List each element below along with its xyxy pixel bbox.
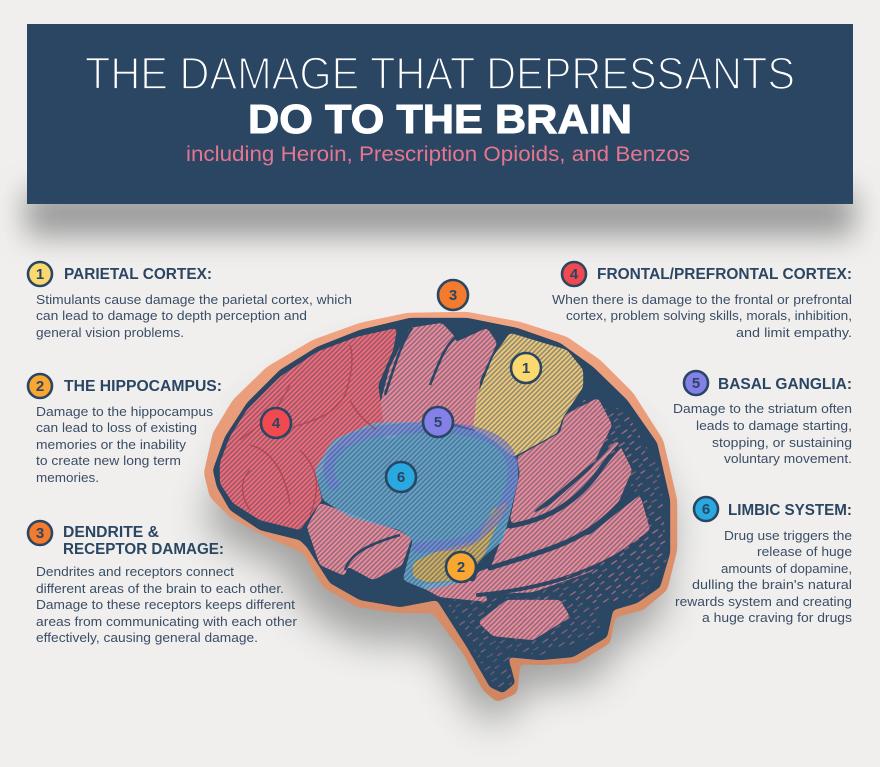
circle 3 xyxy=(438,280,468,310)
text block: dendrite and receptor damage: Damage to these receptors keeps different xyxy=(36,597,295,612)
circle 2 xyxy=(446,552,476,582)
circle 6 xyxy=(386,462,416,492)
region 4: frontal cortex in red xyxy=(220,328,397,530)
text block: limbic system: release of huge xyxy=(757,544,852,559)
brain illustration xyxy=(200,280,680,721)
text block: frontal cortex: When there is damage to the frontal or prefrontal xyxy=(552,292,852,307)
circle 4: 4 xyxy=(272,415,281,432)
text block: limbic system: 6 xyxy=(702,501,710,518)
banner shadow xyxy=(26,190,854,236)
text block: hippocampus: to create new long term xyxy=(36,453,181,468)
text block: frontal cortex: FRONTAL/PREFRONTAL CORTEX: xyxy=(597,266,852,283)
text block: basal ganglia: leads to damage starting, xyxy=(696,418,852,433)
text block: hippocampus: memories. xyxy=(36,470,99,485)
text block: parietal cortex xyxy=(28,262,352,340)
text block: limbic system: LIMBIC SYSTEM: xyxy=(728,502,852,519)
text block: basal ganglia: Damage to the striatum often xyxy=(673,401,852,416)
circle 2: 2 xyxy=(457,559,465,576)
text block: dendrite and receptor damage xyxy=(28,521,298,645)
circle 1: 1 xyxy=(522,360,530,377)
text block: frontal cortex: and limit empathy. xyxy=(736,325,852,340)
text block: hippocampus: Damage to the hippocampus xyxy=(36,404,214,419)
circle 4 xyxy=(261,408,291,438)
text block: basal ganglia: BASAL GANGLIA: xyxy=(718,376,852,393)
peach outline xyxy=(204,312,677,702)
subtitle: including Heroin, Prescription Opioids, and Benzos xyxy=(186,143,690,166)
circle 3: 3 xyxy=(449,287,457,304)
text block: basal ganglia: voluntary movement. xyxy=(724,451,852,466)
lobe creases xyxy=(345,328,458,570)
text block: hippocampus: THE HIPPOCAMPUS: xyxy=(64,378,222,395)
text block: limbic system: a huge craving for drugs xyxy=(702,610,853,625)
text block: dendrite and receptor damage: 3 xyxy=(36,525,44,542)
text block: limbic system: amounts of dopamine, xyxy=(721,561,852,576)
text block: hippocampus: can lead to loss of existing xyxy=(36,420,197,435)
navy folds between right lobes xyxy=(478,440,650,595)
speckle on dark right lobe xyxy=(445,395,667,688)
text block: parietal cortex: can lead to damage to depth perception and xyxy=(36,308,307,323)
circle 1 xyxy=(511,353,541,383)
pink gyri xyxy=(307,323,650,640)
text block: dendrite and receptor damage: DENDRITE & xyxy=(63,524,159,541)
text block: dendrite and receptor damage: areas from communicating with each other xyxy=(36,614,298,629)
text block: parietal cortex: general vision problems. xyxy=(36,325,184,340)
text block: limbic system: Drug use triggers the xyxy=(724,528,852,543)
text block: frontal cortex: 4 xyxy=(570,266,579,283)
title line 1: THE DAMAGE THAT DEPRESSANTS xyxy=(85,48,795,99)
region 6: limbic system in blue xyxy=(315,422,518,590)
region 2: hippocampus in amber xyxy=(413,500,510,582)
red lobe folds xyxy=(240,345,376,515)
text block: limbic system: rewards system and creating xyxy=(675,594,852,609)
text block: limbic system xyxy=(675,497,853,625)
circle 5 xyxy=(423,407,453,437)
text block: basal ganglia: stopping, or sustaining xyxy=(712,435,852,450)
text block: basal ganglia xyxy=(673,371,852,466)
text block: basal ganglia: 5 xyxy=(692,375,700,392)
text block: limbic system: dulling the brain's natural xyxy=(692,577,852,592)
circle 5: 5 xyxy=(434,414,442,431)
text block: dendrite and receptor damage: RECEPTOR DAMAGE: xyxy=(63,541,224,558)
text block: hippocampus: 2 xyxy=(36,378,44,395)
text block: frontal cortex: cortex, problem solving skills, morals, inhibition, xyxy=(566,308,852,323)
title line 2: DO TO THE BRAIN xyxy=(248,96,632,142)
text block: hippocampus: memories or the inability xyxy=(36,437,187,452)
text block: parietal cortex: PARIETAL CORTEX: xyxy=(64,266,212,283)
text block: dendrite and receptor damage: effectively, causing general damage. xyxy=(36,630,258,645)
circle 6: 6 xyxy=(397,469,405,486)
text block: dendrite and receptor damage: Dendrites and receptors connect xyxy=(36,564,234,579)
speckle on lower lobe and stem xyxy=(445,596,600,688)
text block: frontal cortex xyxy=(552,262,852,340)
title banner xyxy=(27,24,853,204)
text block: hippocampus xyxy=(28,374,222,485)
engraving hatch xyxy=(213,318,667,692)
text block: parietal cortex: Stimulants cause damage the parietal cortex, which xyxy=(36,292,352,307)
navy brain silhouette xyxy=(213,318,670,693)
text block: dendrite and receptor damage: different areas of the brain to each other. xyxy=(36,581,284,596)
text block: parietal cortex: 1 xyxy=(36,266,44,283)
region 5: basal ganglia purple band xyxy=(329,427,513,548)
region 1: parietal cortex in yellow xyxy=(473,333,583,457)
